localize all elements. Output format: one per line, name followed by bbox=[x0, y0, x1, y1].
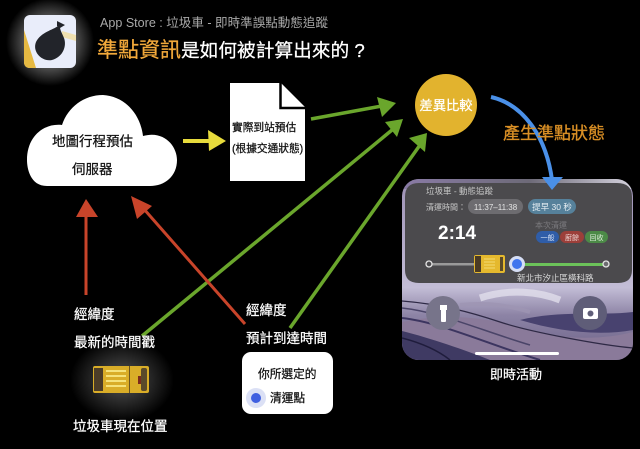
document: estimated arrival: (根據交通狀態) bbox=[232, 142, 303, 155]
document: estimated arrival: 實際到站預估 bbox=[232, 121, 296, 134]
text: truck data: 經緯度 bbox=[74, 307, 114, 322]
app icon bbox=[6, 0, 94, 86]
label: generate status: 產生準點狀態 bbox=[503, 124, 605, 143]
card: selected stop: 清運點 bbox=[270, 391, 305, 405]
live activity widget: 一般 bbox=[540, 233, 554, 242]
card: selected stop: 你所選定的 bbox=[258, 367, 316, 381]
cloud: map routing server: 地圖行程預估 bbox=[52, 134, 133, 149]
camera button bbox=[573, 296, 607, 330]
card: selected stop bbox=[242, 352, 333, 414]
text: stop data bbox=[246, 303, 327, 346]
live activity widget: 2:14 bbox=[438, 223, 476, 244]
caption: live activity: 即時活動 bbox=[490, 367, 542, 382]
document: estimated arrival bbox=[230, 83, 305, 181]
live activity widget: 清運時間： bbox=[426, 202, 466, 212]
live activity widget: 廚餘 bbox=[565, 233, 579, 242]
live activity widget: 回收 bbox=[590, 233, 604, 242]
text: truck data bbox=[74, 307, 155, 350]
current location marker bbox=[509, 256, 525, 272]
live activity widget: 11:37–11:38 bbox=[474, 203, 518, 212]
text: stop data: 預計到達時間 bbox=[246, 331, 327, 346]
arrow: red arrival data to server bbox=[131, 196, 245, 324]
arrow: blue compare to live activity bbox=[491, 97, 563, 190]
compare circle bbox=[415, 74, 477, 136]
phone lock screen bbox=[402, 179, 633, 360]
live activity widget: 新北市汐止區橫科路 bbox=[517, 273, 594, 283]
arrow: red coordinates to server bbox=[76, 199, 98, 295]
icon: garbage truck with glow bbox=[70, 338, 174, 422]
home indicator bbox=[475, 352, 559, 355]
flashlight button bbox=[426, 296, 460, 330]
truck on track bbox=[474, 255, 505, 273]
text: truck data: 最新的時間戳 bbox=[74, 335, 155, 350]
arrow: yellow cloud to document bbox=[183, 130, 226, 151]
live activity widget: 垃圾車 - 動態追蹤 bbox=[426, 186, 494, 196]
cloud: map routing server bbox=[27, 95, 177, 186]
compare circle: 差異比較 bbox=[419, 98, 473, 113]
caption: truck position: 垃圾車現在位置 bbox=[73, 419, 168, 434]
live activity widget: 提早 30 秒 bbox=[532, 202, 572, 212]
cloud: map routing server: 伺服器 bbox=[72, 162, 112, 177]
arrow: green stop data to compare bbox=[290, 133, 427, 328]
app store subtitle: App Store : 垃圾車 - 即時準誤點動態追蹤 bbox=[100, 15, 328, 30]
live activity widget: 本次清運 bbox=[535, 220, 567, 230]
title: 準點資訊是如何被計算出來的 ? bbox=[97, 39, 365, 62]
arrow: green truck data to compare bbox=[142, 119, 403, 336]
live activity widget bbox=[405, 183, 632, 283]
text: stop data: 經緯度 bbox=[246, 303, 286, 318]
progress track bbox=[426, 261, 609, 267]
arrow: green document to compare bbox=[311, 97, 396, 119]
